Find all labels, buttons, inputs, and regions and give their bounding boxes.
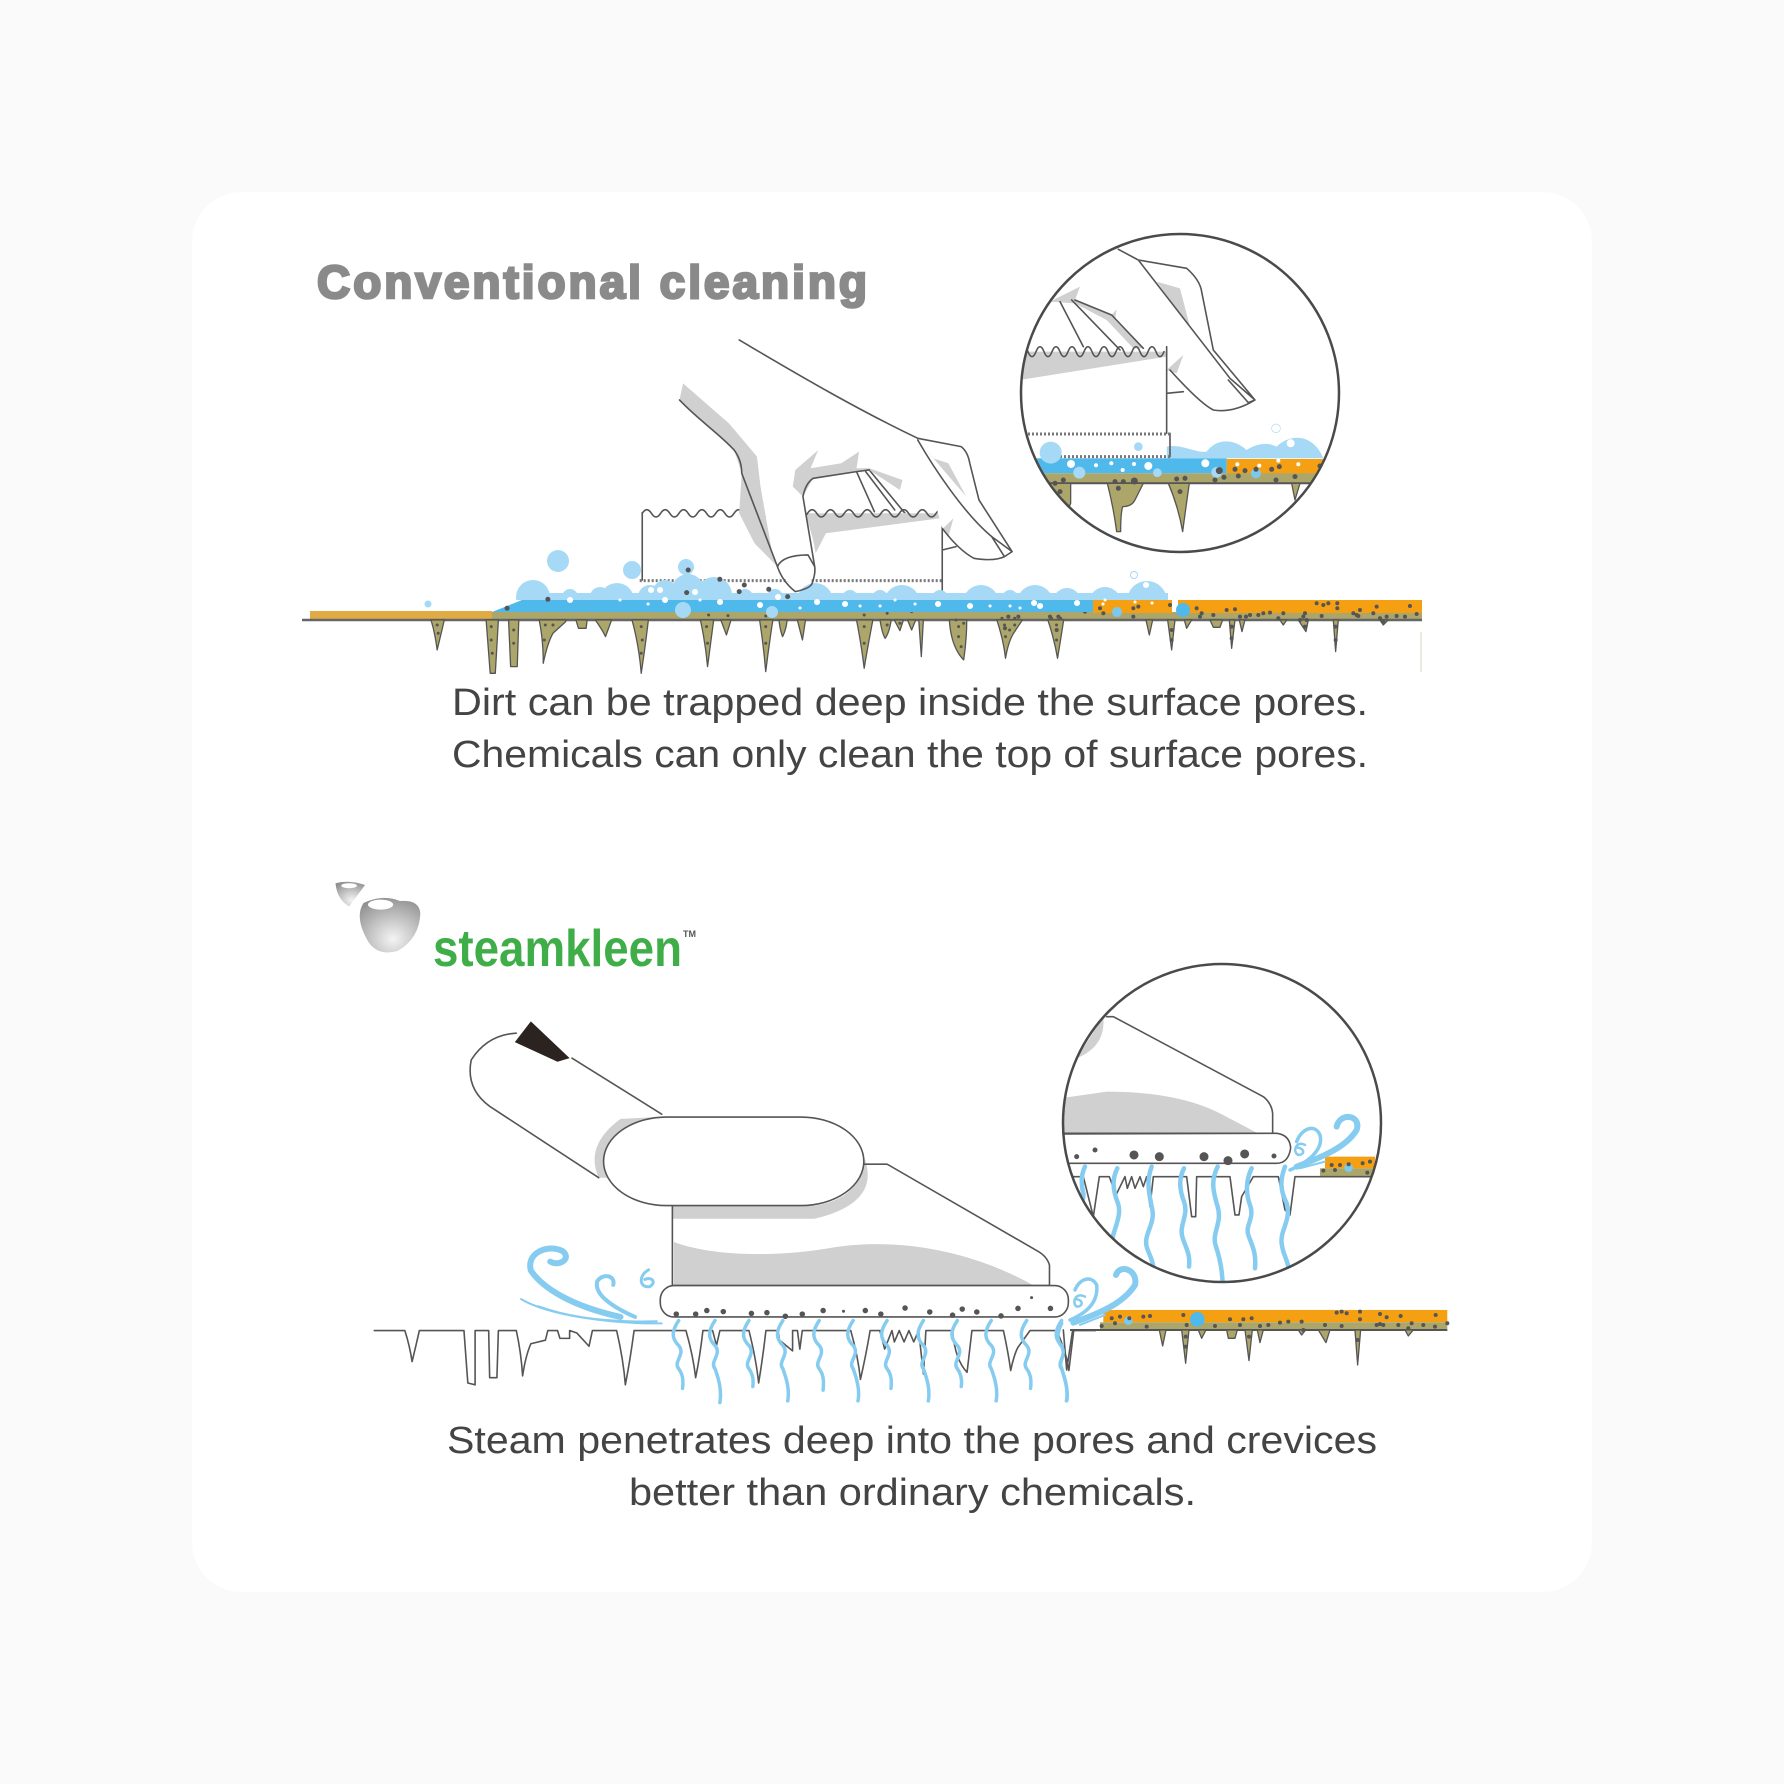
handle pill [604,1117,864,1206]
surface with clean pores [374,1331,1096,1385]
dirt in foot [676,1308,1050,1316]
sponge top wavy edge [642,510,945,517]
magnified foot [1060,1133,1291,1163]
magnified steam wisps [1073,1167,1288,1287]
magnified pores [1043,483,1300,532]
callout: magnified circle of nozzle foot [1060,964,1381,1287]
bubble [1190,1312,1205,1327]
middle fingers [857,470,905,513]
magnified dirt specks [1055,466,1320,492]
black tip [515,1021,570,1062]
pores right [1005,603,1417,652]
trademark: TM [683,929,696,939]
panel: steamkleen [336,882,1447,1514]
magnified sponge [1166,393,1167,456]
panel: white card [192,192,1592,1592]
tan dirt layer [492,612,1422,620]
orange dirt layer [1103,1310,1447,1322]
title: conventional cleaning: Conventional cleaning [317,256,867,308]
magnified dirt in foot [1077,1150,1274,1157]
magnified solution [1167,438,1323,458]
illustration: surface with dirt right of nozzle [1058,1269,1447,1400]
magnified nozzle outline [1060,1017,1273,1133]
dirt specks [1102,1312,1447,1347]
icon: water drops [336,882,420,952]
orange dirt layers [1093,600,1422,613]
infographic canvas [302,232,1450,1513]
magnified bubbles [1040,442,1062,464]
blue solution band [492,600,1093,612]
illustration: hand holding sponge [679,340,1012,592]
circle outline [1021,234,1339,552]
gold dirt layer [310,611,492,619]
sponge shadow [806,513,941,553]
loose bubbles [547,550,569,572]
magnified contents [1000,249,1333,532]
sponge outline [642,513,942,590]
foam bubbles [516,574,1168,600]
hand shading [918,440,966,537]
dirt specks rising in foam [507,570,788,608]
index finger [918,440,1012,560]
steam wisps rising [673,1321,1067,1403]
magnified steam puffs [1297,1117,1357,1167]
callout: magnified circle of sponge on surface [1000,234,1339,552]
caption: steamkleen: Steam penetrates deep into the pores and crevices [447,1420,1377,1462]
magnified specks and bubble [1344,1163,1353,1172]
body outline [672,1164,1049,1286]
nozzle shadow [595,1117,868,1219]
tan dirt layer [1100,1322,1447,1330]
caption: conventional cleaning: Chemicals can only clean the top of surface pores. [452,734,1368,776]
magnified contents [1060,1017,1375,1287]
panel: conventional cleaning [302,234,1422,776]
sponge bottom edge [640,579,943,582]
wordmark: steamkleen [433,920,682,978]
illustration: sponge behind fingers [640,470,945,590]
body shading [674,1242,1033,1285]
pressing finger [757,457,815,592]
caption: steamkleen [447,1420,1377,1514]
foam and soap solution [424,550,1190,621]
magnified dirt layers [1325,1157,1375,1168]
dirt pores [1159,1330,1413,1365]
caption: conventional cleaning [452,682,1368,776]
steam puffs left [530,1248,621,1317]
steam puffs right [1073,1269,1135,1323]
illustration: surface with dirt in pores [302,600,1422,673]
circle fill [1063,964,1381,1282]
finger shadow on sponge [679,383,777,567]
caption: steamkleen: better than ordinary chemicals. [629,1472,1196,1514]
magnified nozzle shading [1060,1017,1257,1133]
sponge body [642,513,942,590]
magnified highlights [1071,428,1291,466]
logo: steamkleen [336,882,696,978]
nozzle end pore [1063,1330,1073,1370]
foot [660,1286,1068,1317]
surface line [302,619,1422,621]
surface line [1070,1329,1447,1331]
magnified fingers [1050,287,1143,348]
circle outline [1063,964,1381,1282]
hand outline [739,340,1012,560]
circle fill [1021,234,1339,552]
white highlights [570,575,1146,606]
magnified surface and pores [1067,1177,1373,1217]
nozzle neck [470,1033,662,1178]
last steam wisp [1058,1323,1067,1400]
illustration: steam nozzle on surface [374,1021,1096,1403]
pores left and middle [431,612,1064,673]
faint edge mark [1420,632,1422,672]
fingernail [777,555,815,567]
caption: conventional cleaning: Dirt can be trapped deep inside the surface pores. [452,682,1368,724]
